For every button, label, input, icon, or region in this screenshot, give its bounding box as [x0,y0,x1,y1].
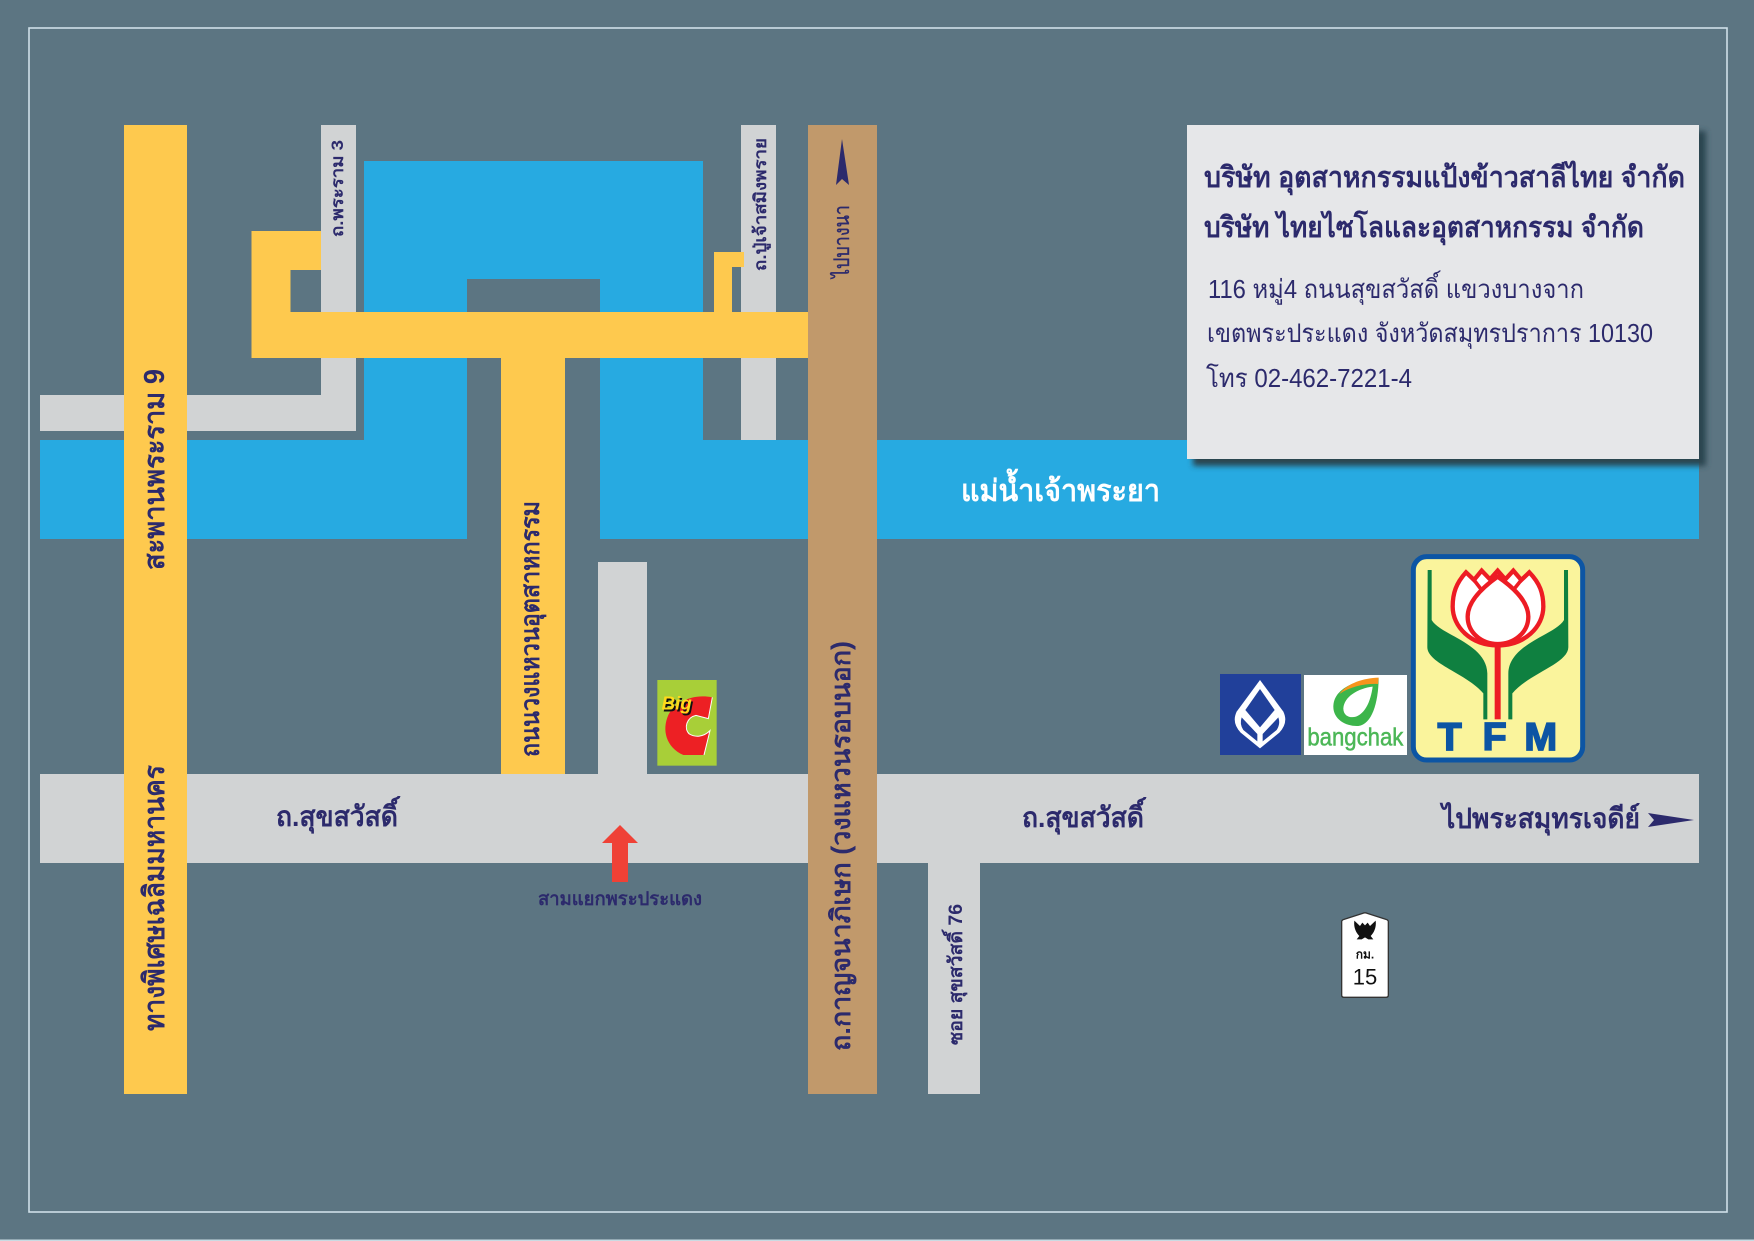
label: Rama 9 bridge: สะพานพระราม 9 [139,369,171,570]
road: Rama 9 bridge expressway [124,125,187,1094]
label: expressway: ทางพิเศษเฉลิมมหานคร [139,765,171,1031]
text: km route prefix: กม. [1356,947,1374,961]
label: Phra Pradaeng junction: สามแยกพระประแดง [538,889,702,910]
text: phone: โทร 02-462-7221-4 [1206,363,1412,393]
panel: company address card [1187,125,1706,466]
icon: garuda emblem [1354,921,1376,939]
river and canals [40,161,1699,539]
icon: TFM logo [1413,557,1583,760]
label: Sukhumvit road west: ถ.สุขสวัสดิ์ [276,796,400,834]
label: Sukhumvit road east: ถ.สุขสวัสดิ์ [1022,797,1146,835]
icon: Bangchak logo: bangchak [1307,723,1404,751]
label: Soi 76: ซอย สุขสวัสดิ์ 76 [941,904,968,1045]
arrow: to Bang Na [836,139,849,185]
label: Rama 3 road: ถ.พระราม 3 [328,140,347,237]
icon: Big C logo: Big [662,693,692,714]
icon: Big C logo: Big [663,695,694,716]
label: to Phra Samut Chedi: ไปพระสมุทรเจดีย์ [1439,802,1640,836]
text: address line 2: เขตพระประแดง จังหวัดสมุทรปราการ 10130 [1207,318,1653,349]
road: industrial ring road and expressway ramps [252,231,808,774]
road: Soi Sukhumvit 76 [928,860,980,1094]
icon: TFM logo: F [1483,715,1507,759]
road: Sukhumvit [40,774,1699,863]
road: Sukhumvit side stub [598,562,647,776]
icon: TFM logo: M [1524,715,1557,759]
icon: Bangkok Bank logo [1220,674,1301,755]
road: Kanchanaphisek [808,125,877,1094]
arrow: to Phra Samut Chedi [1648,813,1694,827]
label: Kanchanaphisek: ถ.กาญจนาภิเษก (วงแหวนรอบนอก) [826,641,857,1051]
icon: TFM logo: T [1438,715,1462,759]
heading: company name 1: บริษัท อุตสาหกรรมแป้งข้าวสาลีไทย จำกัด [1204,160,1685,195]
icon: Bangchak logo [1304,675,1407,755]
label: to Bang Na: ไปบางนา [830,205,854,280]
label: Chao Phraya river: แม่น้ำเจ้าพระยา [961,468,1160,508]
arrow: red junction marker [602,825,638,882]
label: industrial ring road: ถนนวงแหวนอุตสาหกรรม [515,501,547,757]
road: Pu Chao Saming Phrai [741,125,776,440]
icon: highway sign 15 [1342,913,1388,997]
heading: company name 2: บริษัท ไทยไซโลและอุตสาหกรรม จำกัด [1204,209,1644,245]
icon: Big C logo [657,680,717,766]
text: address line 1: 116 หมู่4 ถนนสุขสวัสดิ์ แขวงบางจาก [1208,270,1584,305]
label: Pu Chao Saming Phrai road: ถ.ปู่เจ้าสมิงพราย [751,138,772,271]
road: Rama 3 [40,125,356,431]
text: route number: 15 [1353,965,1377,990]
